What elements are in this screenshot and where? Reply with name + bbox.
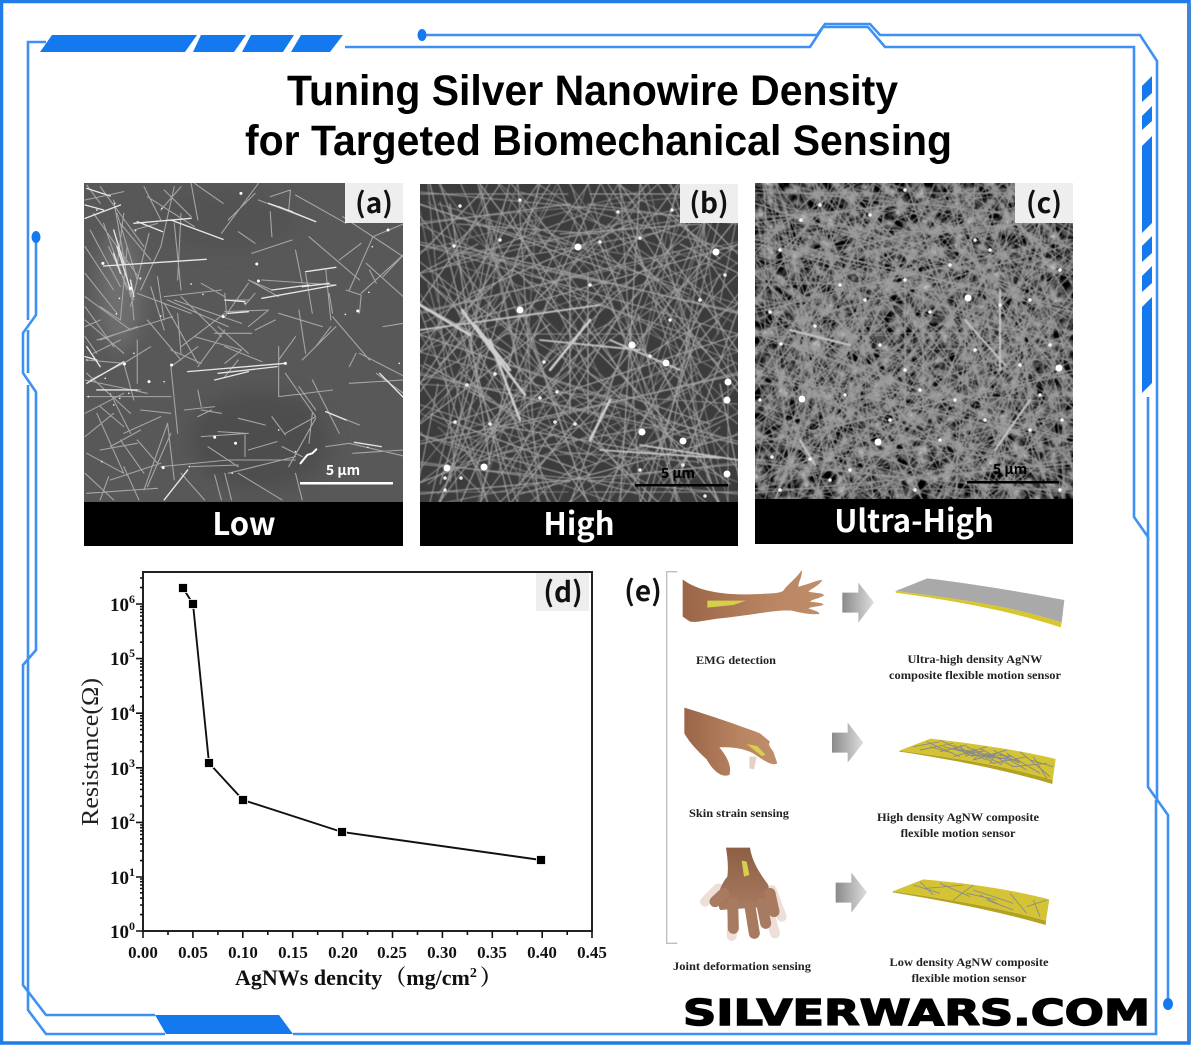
icon: top hand with patch xyxy=(705,848,782,936)
caption: ultra-high sensor: composite flexible motion sensor xyxy=(889,668,1062,682)
scale bar b: 5 µm xyxy=(661,463,695,483)
scale bar a xyxy=(300,460,393,484)
caption: EMG detection: EMG detection xyxy=(696,653,776,667)
caption: ultra-high sensor xyxy=(889,652,1062,682)
right outer edge xyxy=(1187,3,1191,1041)
bottom left filled trapezoid xyxy=(155,1015,293,1034)
x axis title: AgNWs dencity（mg/cm xyxy=(235,965,470,990)
bar: Low xyxy=(84,499,403,546)
bar: High xyxy=(420,499,738,546)
data line xyxy=(183,588,541,860)
chart: resistance vs AgNW density xyxy=(78,571,607,990)
x tick labels: 0.25 xyxy=(377,943,407,962)
caption: low density sensor: Low density AgNW composite xyxy=(890,955,1049,969)
scale bar c: 5 µm xyxy=(993,459,1027,479)
y axis title: Resistance(Ω) xyxy=(78,678,104,826)
y tick labels: 2 xyxy=(129,810,135,824)
y tick labels: 4 xyxy=(129,701,135,715)
caption: low density sensor: flexible motion sensor xyxy=(912,971,1027,985)
panel: (e) applications xyxy=(624,570,1064,985)
scale bar b xyxy=(635,463,728,486)
label (b): (b) xyxy=(689,182,729,222)
y tick labels: 5 xyxy=(129,646,135,660)
y ticks xyxy=(136,578,143,931)
sensor: ultra-high density xyxy=(896,578,1064,627)
title: Tuning Silver Nanowire Density xyxy=(287,67,898,115)
caption: high density sensor: flexible motion sensor xyxy=(900,826,1016,840)
x tick labels: 0.05 xyxy=(178,943,208,962)
x ticks xyxy=(143,931,592,938)
caption: low density sensor xyxy=(890,955,1049,985)
x axis title: ） xyxy=(480,965,502,990)
data markers xyxy=(178,584,546,864)
caption: high density sensor xyxy=(877,810,1040,840)
caption: high density sensor: High density AgNW composite xyxy=(877,810,1040,824)
panel: (b) high density micrograph xyxy=(418,182,740,546)
scale bar c xyxy=(967,459,1059,484)
x tick labels: 0.10 xyxy=(228,943,258,962)
y tick labels: 0 xyxy=(129,919,135,933)
title xyxy=(245,67,952,165)
label (a) xyxy=(345,182,403,223)
y tick labels: 10 xyxy=(110,704,129,725)
label (b) xyxy=(680,182,738,223)
label (c) xyxy=(1015,182,1073,223)
icon: forearm with patch xyxy=(683,570,824,622)
y tick labels: 3 xyxy=(129,756,135,770)
y tick labels: 10 xyxy=(110,759,129,780)
bar: Ultra-High: Ultra-High xyxy=(834,496,994,541)
x tick labels: 0.00 xyxy=(128,943,158,962)
arrow row 2 xyxy=(832,723,863,763)
x tick labels: 0.15 xyxy=(278,943,308,962)
x tick labels: 0.40 xyxy=(527,943,557,962)
top left slanted bars xyxy=(40,35,343,52)
arrow row 3 xyxy=(836,873,867,913)
caption: skin strain sensing: Skin strain sensing xyxy=(689,806,789,820)
label (e): (e) xyxy=(624,570,662,610)
arrow row 1 xyxy=(842,583,874,623)
x tick labels: 0.30 xyxy=(427,943,457,962)
y tick labels: 1 xyxy=(129,865,135,879)
y tick labels xyxy=(110,592,135,943)
sensor: high density xyxy=(899,739,1056,784)
bracket xyxy=(667,572,677,943)
x axis title: 2 xyxy=(470,966,477,981)
y tick labels: 6 xyxy=(129,592,135,606)
caption: joint deformation sensing: Joint deformation sensing xyxy=(673,959,811,973)
bar: High: High xyxy=(543,499,615,544)
y tick labels: 10 xyxy=(110,649,129,670)
panel: (c) ultra-high density micrograph xyxy=(755,183,1073,544)
panel: (a) low density micrograph xyxy=(84,182,407,546)
icon: side hand with patch xyxy=(684,708,777,776)
title: for Targeted Biomechanical Sensing xyxy=(245,117,952,165)
scale bar a: 5 µm xyxy=(326,460,360,480)
label (d): (d) xyxy=(543,571,583,611)
right side slanted bars xyxy=(1142,76,1152,393)
x tick labels: 0.20 xyxy=(328,943,358,962)
caption: ultra-high sensor: Ultra-high density AgNW xyxy=(908,652,1042,666)
y tick labels: 10 xyxy=(110,868,129,889)
bar: Ultra-High xyxy=(755,496,1073,544)
axes frame xyxy=(143,572,592,931)
y tick labels: 10 xyxy=(110,922,129,943)
label (c): (c) xyxy=(1026,182,1062,222)
y tick labels: 10 xyxy=(110,595,129,616)
watermark: SILVERWARS.COM: SILVERWARS.COM xyxy=(683,993,1150,1034)
bar: Low: Low xyxy=(212,499,276,544)
x tick labels xyxy=(128,943,607,962)
y tick labels: 10 xyxy=(110,813,129,834)
label (a): (a) xyxy=(355,182,393,222)
x tick labels: 0.45 xyxy=(577,943,607,962)
sensor: low density xyxy=(893,879,1049,925)
x tick labels: 0.35 xyxy=(477,943,507,962)
